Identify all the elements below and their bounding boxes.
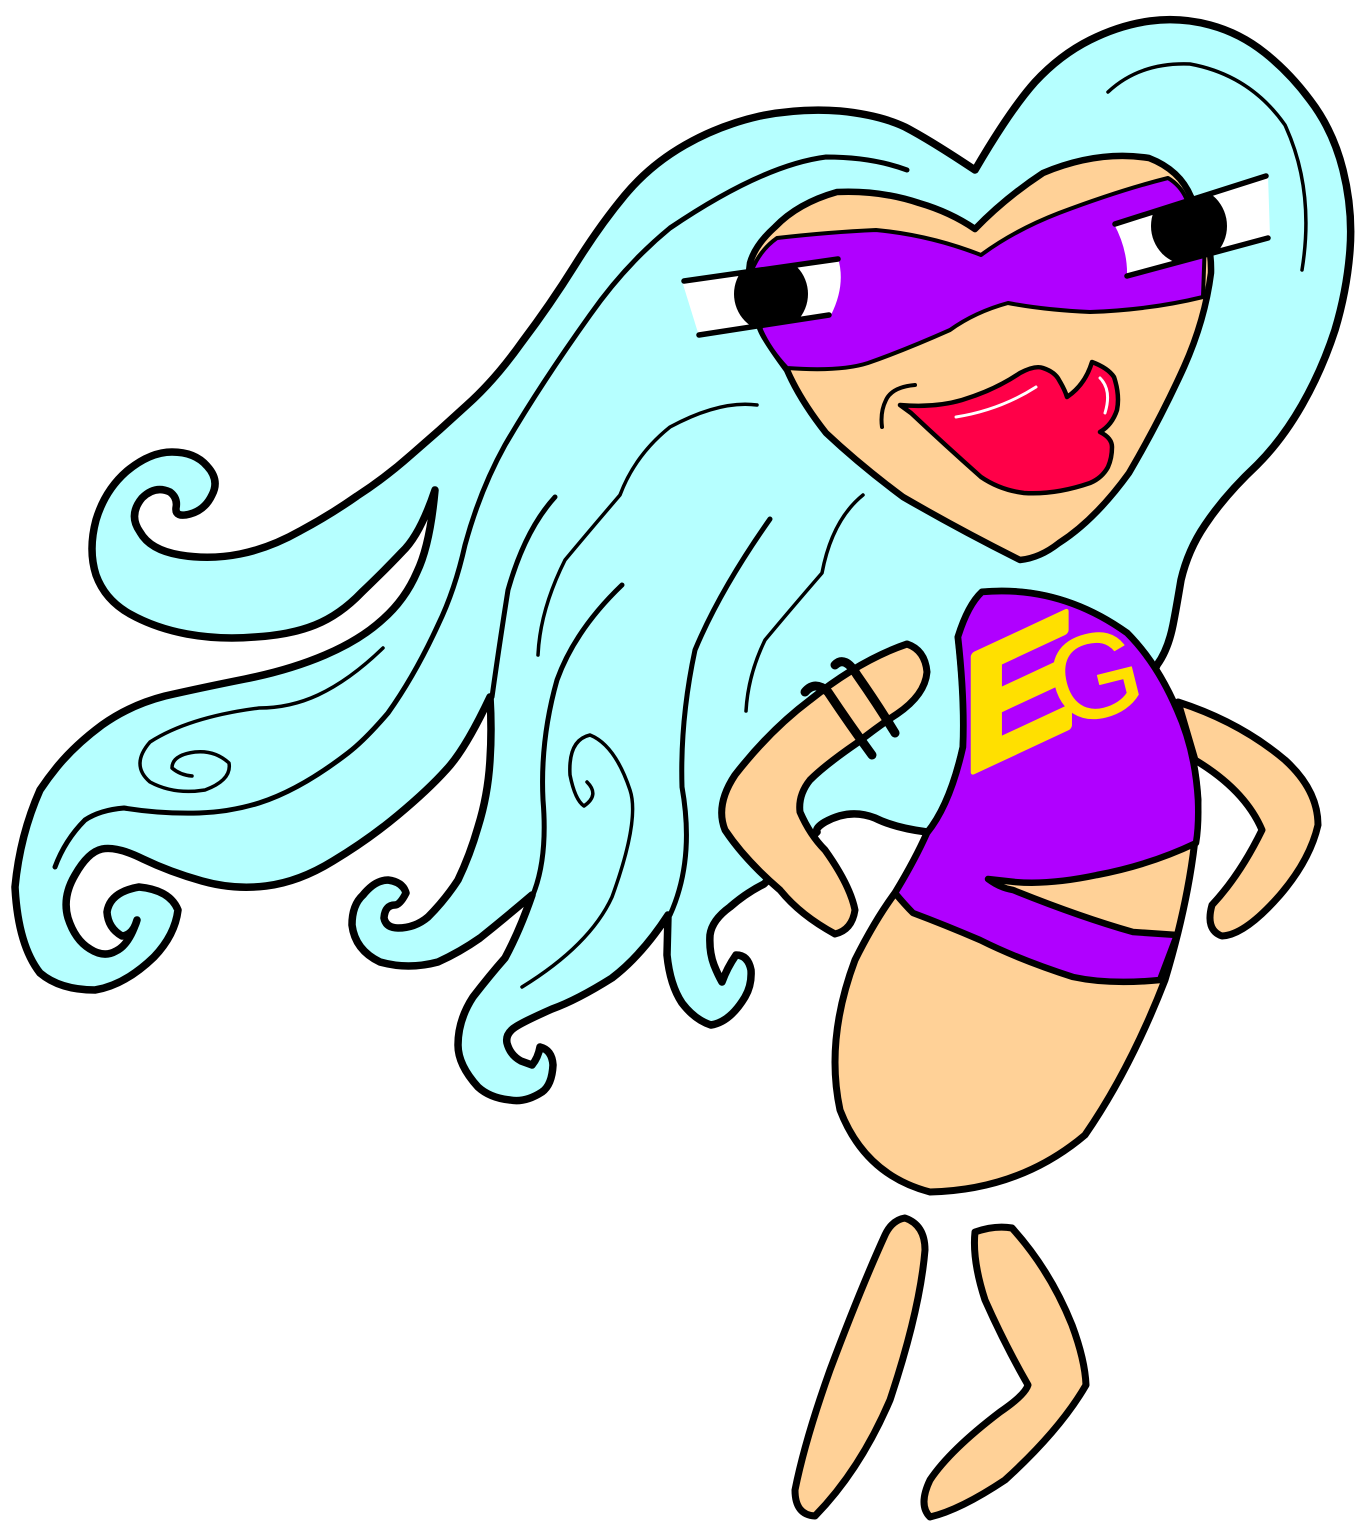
upper bracelet (835, 662, 895, 733)
purple top and waistband (895, 591, 1198, 982)
spiral curl line centre (522, 735, 633, 987)
head (682, 156, 1270, 560)
top right highlight line (1108, 64, 1306, 270)
logo letter E: E (963, 573, 1075, 812)
spiral curl line left (140, 648, 383, 791)
bracelets (805, 662, 895, 755)
hair (15, 20, 1351, 1101)
short line beside chest (746, 495, 863, 711)
body (835, 591, 1198, 1192)
centre strand edge (492, 497, 555, 697)
lip highlights (956, 378, 1108, 417)
right eye (1114, 175, 1270, 277)
face (749, 156, 1211, 560)
right eye white (1114, 175, 1270, 277)
left strand edge (532, 585, 622, 897)
smile crease (882, 385, 915, 427)
right arm (1178, 702, 1318, 936)
left arm (722, 644, 927, 934)
left eye (682, 256, 841, 336)
left pupil (734, 268, 808, 324)
lips (900, 362, 1118, 493)
hair strand lines (55, 64, 1306, 987)
left leg (795, 1218, 925, 1516)
long hair line (55, 157, 907, 867)
logo letter G: G (1033, 600, 1156, 753)
right strand edge (670, 519, 770, 915)
right pupil (1151, 196, 1227, 261)
centre curling line (538, 404, 757, 655)
logo: EG (963, 573, 1156, 812)
right leg (924, 1227, 1086, 1517)
purple mask (752, 178, 1205, 369)
lower bracelet (805, 686, 872, 755)
right eye lids (1115, 176, 1268, 276)
left eye white (682, 258, 841, 336)
left eye lids (684, 259, 838, 335)
